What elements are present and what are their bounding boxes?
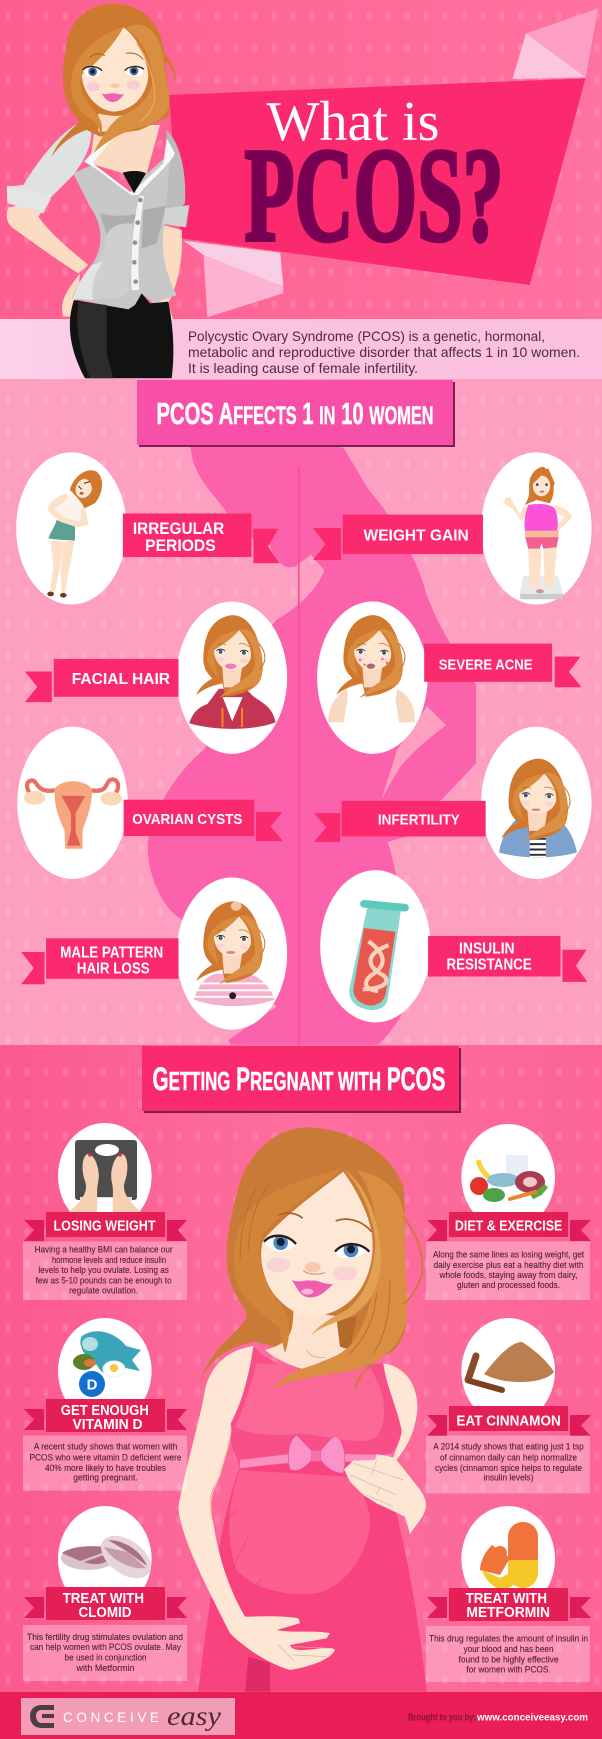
intro text: It is leading cause of female infertility.	[188, 360, 418, 376]
item: severe acne: SEVERE ACNE	[439, 658, 533, 674]
card: vitamin D: GET ENOUGH	[61, 1403, 149, 1419]
card: losing weight: Having a healthy BMI can balance our	[35, 1244, 173, 1255]
item: male pattern hair loss: MALE PATTERN	[60, 944, 163, 961]
footer credit: Brought to you by:	[408, 1712, 476, 1723]
logo: Conceive Easy: easy	[167, 1701, 221, 1731]
item: weight gain: WEIGHT GAIN	[364, 527, 469, 545]
card: metformin	[426, 1506, 591, 1682]
title banner	[169, 8, 598, 317]
card: metformin: METFORMIN	[466, 1605, 550, 1621]
card: losing weight: few as 5-10 pounds can be enough to	[36, 1276, 172, 1287]
intro text: Polycystic Ovary Syndrome (PCOS) is a genetic, hormonal,	[188, 328, 545, 344]
card: vitamin D: 40% more likely to have troubles	[45, 1463, 166, 1474]
item: insulin resistance: INSULIN	[459, 941, 515, 958]
item: ovarian cysts: OVARIAN CYSTS	[132, 812, 243, 828]
symptoms grid	[16, 452, 592, 1030]
item: insulin resistance	[320, 870, 587, 1022]
card: vitamin D: D	[87, 1376, 98, 1394]
title: What is: What is	[266, 91, 440, 153]
intro text	[188, 328, 580, 376]
item: infertility: INFERTILITY	[378, 813, 460, 829]
card: eat cinnamon	[426, 1318, 591, 1494]
pregnant woman	[178, 1127, 427, 1692]
background: pregnant section	[0, 1045, 602, 1693]
card: clomid: with Metformin	[76, 1663, 134, 1674]
woman head	[200, 1127, 423, 1389]
background: header section	[0, 0, 602, 320]
item: infertility	[314, 727, 592, 879]
card: metformin: found to be highly effective	[458, 1654, 558, 1666]
heading: Getting Pregnant with PCOS	[142, 1046, 461, 1113]
card: clomid: CLOMID	[78, 1605, 132, 1621]
item: irregular periods: PERIODS	[145, 536, 216, 555]
item: irregular periods: IRREGULAR	[133, 519, 224, 538]
card: diet and exercise: gluten and processed foods.	[457, 1280, 560, 1291]
hero woman	[7, 3, 189, 378]
footer credit	[408, 1712, 588, 1723]
card: eat cinnamon: of cinnamon daily can help normalize	[440, 1452, 577, 1463]
item: irregular periods	[16, 452, 279, 605]
card: metformin: for women with PCOS.	[466, 1664, 551, 1675]
logo: Conceive Easy	[21, 1698, 235, 1735]
item: facial hair: FACIAL HAIR	[72, 670, 170, 688]
card: losing weight: LOSING WEIGHT	[54, 1218, 156, 1234]
item: facial hair	[25, 601, 287, 754]
card: eat cinnamon: insulin levels)	[484, 1473, 534, 1484]
card: clomid	[23, 1506, 187, 1681]
card: clomid: TREAT WITH	[63, 1591, 144, 1607]
heading: PCOS Affects 1 in 10 women: PCOS AFFECTS 1 IN 10 WOMEN	[156, 396, 434, 431]
hero body	[7, 125, 189, 378]
item: weight gain	[313, 452, 592, 605]
item: ovarian cysts	[17, 727, 283, 879]
card: diet and exercise	[426, 1124, 591, 1300]
intro text: metabolic and reproductive disorder that affects 1 in 10 women.	[188, 344, 580, 360]
card: losing weight: levels to help you ovulate. Losing as	[38, 1265, 169, 1276]
heading: Getting Pregnant with PCOS: GETTING PREGNANT WITH PCOS	[152, 1061, 446, 1097]
item: severe acne	[317, 601, 582, 754]
footer bar	[0, 1692, 602, 1739]
card: eat cinnamon: A 2014 study shows that eating just 1 tsp	[433, 1442, 584, 1452]
card: diet and exercise: DIET & EXERCISE	[455, 1218, 563, 1234]
item: insulin resistance: RESISTANCE	[446, 957, 532, 974]
card: losing weight	[23, 1123, 187, 1300]
woman body	[178, 1345, 427, 1692]
card: clomid: be used in conjunction	[64, 1653, 146, 1664]
background: intro band	[0, 319, 602, 379]
card: vitamin D: PCOS who were vitamin D deficient were	[30, 1452, 182, 1463]
card: losing weight: regulate ovulation.	[69, 1286, 138, 1297]
centre line	[298, 467, 300, 1045]
card: vitamin D: A recent study shows that women with	[34, 1442, 177, 1452]
background: symptoms section	[0, 379, 602, 1045]
card: losing weight: hormone levels and reduce insulin	[52, 1255, 166, 1266]
card: vitamin D: getting pregnant.	[73, 1473, 138, 1484]
card: clomid: This fertility drug stimulates ovulation and	[27, 1632, 183, 1643]
card: eat cinnamon: EAT CINNAMON	[456, 1414, 561, 1430]
logo: Conceive Easy: CONCEIVE	[63, 1710, 159, 1725]
figure: girl on scale	[504, 467, 572, 599]
card: vitamin D	[23, 1318, 187, 1490]
figure: girl holding stomach	[47, 470, 102, 598]
hero head	[52, 3, 176, 157]
footer credit: www.conceiveeasy.com	[476, 1712, 588, 1723]
card: metformin: your blood and has been	[464, 1644, 554, 1655]
card: diet and exercise: whole foods, staying away from dairy,	[439, 1270, 578, 1281]
item: male pattern hair loss: HAIR LOSS	[77, 961, 150, 977]
item: male pattern hair loss	[21, 877, 287, 1030]
silhouette: pregnant woman	[148, 432, 476, 1045]
card: clomid: can help women with PCOS ovulate. May	[30, 1642, 181, 1653]
card: vitamin D: VITAMIN D	[72, 1417, 142, 1433]
heading: PCOS Affects 1 in 10 women	[137, 380, 455, 447]
card: metformin: TREAT WITH	[466, 1591, 547, 1607]
